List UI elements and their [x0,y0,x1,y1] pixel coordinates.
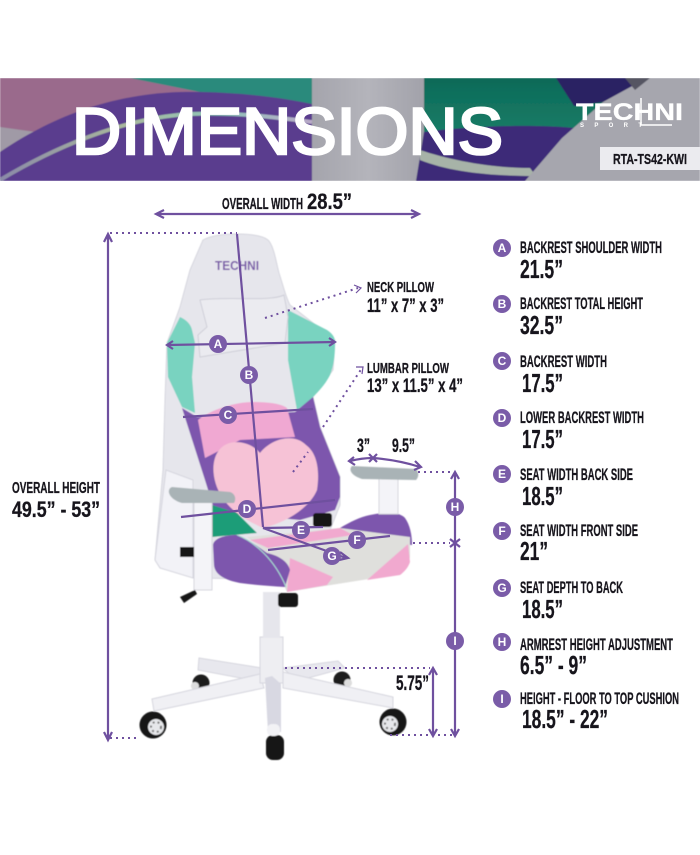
left armrest [169,487,235,603]
item E [493,465,633,511]
item D: D [498,411,507,425]
chair callout markers [209,335,464,650]
seat [213,513,412,592]
chair callout markers: E [297,523,305,537]
item A [493,238,662,284]
chair callout markers: A [214,337,223,351]
teal panels [167,310,335,413]
item E: E [498,467,506,481]
rear side shell [155,470,193,578]
chair callout markers: F [353,533,361,547]
armrest depth labels: 9.5” [392,436,415,457]
overall height label: OVERALL HEIGHT [12,480,100,497]
armrest depth labels [357,436,415,457]
pink lumbar panel [198,402,295,458]
backrest [155,234,340,580]
right armrest [350,466,418,514]
item A: 21.5” [520,254,563,284]
item F: F [498,524,506,538]
dimension list [493,238,679,734]
item C: BACKREST WIDTH [520,352,607,371]
item B: B [498,297,507,311]
item H: 6.5” - 9” [520,650,587,680]
neck pillow label: 11” x 7” x 3” [367,296,444,317]
lumbar pillow label: 13” x 11.5” x 4” [367,376,463,397]
overall height label [12,480,100,522]
item H: H [498,635,506,649]
item D: 17.5” [522,424,563,454]
chair callout markers: D [243,502,252,516]
purple lower back [182,397,340,520]
item B [493,294,643,340]
green seat back [212,505,257,537]
overall width label [222,189,352,214]
item G: G [497,581,507,595]
item D [493,408,644,454]
model number tag [600,147,700,170]
overall width label: OVERALL WIDTH [222,196,303,213]
item I: I [500,692,504,706]
heart pillow [213,438,318,528]
item A: A [498,241,507,255]
item B: 32.5” [520,310,563,340]
item H [493,633,673,680]
base height label: 5.75” [396,672,429,695]
item C [493,352,607,398]
item G [493,578,623,624]
title: DIMENSIONS [72,94,503,168]
backrest logo: TECHNI [215,258,259,273]
header banner [0,78,700,181]
chair base and casters [140,592,406,760]
overall height label: 49.5” - 53” [12,497,100,522]
armrest depth labels: 3” [357,436,370,457]
item F [493,521,638,566]
item C: 17.5” [522,368,563,398]
neck pillow label: NECK PILLOW [367,279,435,296]
brand logo: SPORT [580,123,642,129]
item I: 18.5” - 22” [522,704,608,734]
chair callout markers: G [327,549,337,563]
lumbar pillow label: LUMBAR PILLOW [367,360,450,377]
neck pillow [198,295,288,357]
chair callout markers: B [245,368,254,382]
item F: 21” [520,536,548,566]
chair callout markers: H [451,500,459,514]
brand logo: TECHNI [576,99,683,126]
item I [493,689,679,734]
chair callout markers: I [453,634,457,648]
overall width label: 28.5” [307,189,352,214]
item G: 18.5” [522,594,563,624]
chair callout markers: C [224,408,233,422]
item E: 18.5” [522,481,563,511]
item C: C [498,354,507,368]
lumbar pillow label [367,360,463,397]
chair illustration [140,234,418,760]
neck pillow label [367,279,444,317]
dimension lines [104,210,460,740]
